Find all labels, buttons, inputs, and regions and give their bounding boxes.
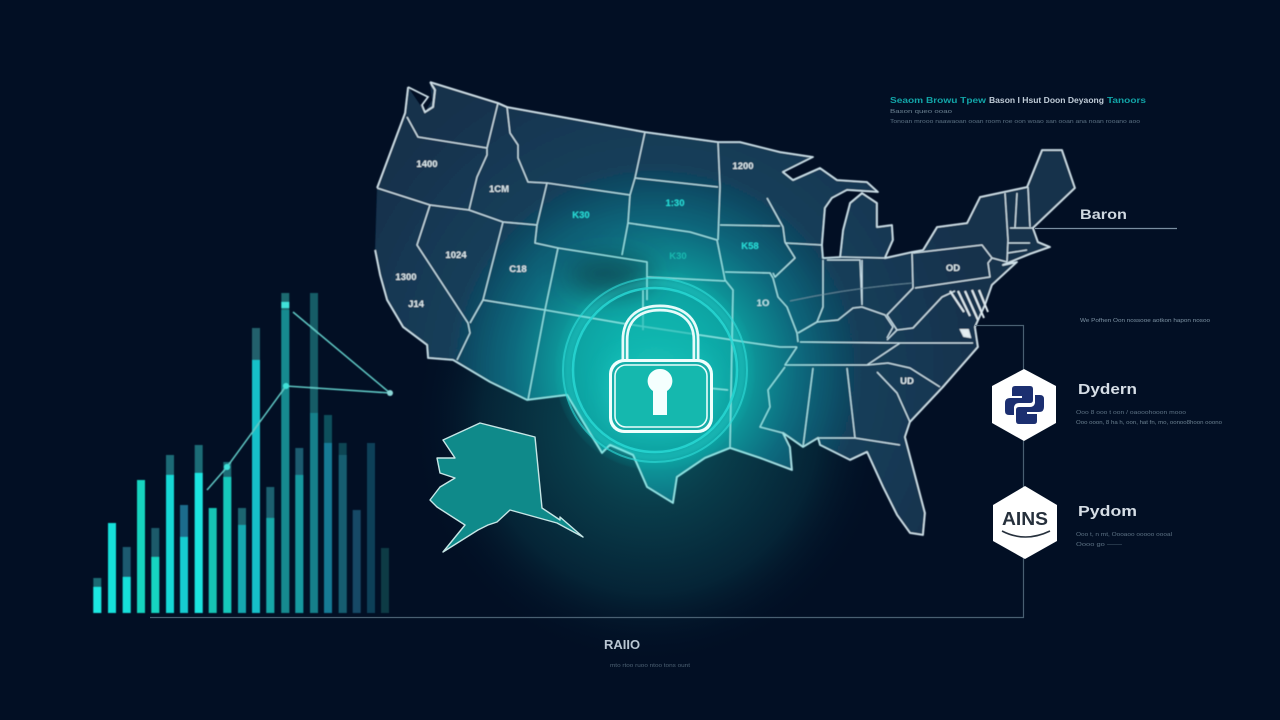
state value labels: K30 <box>572 210 590 221</box>
bar chart <box>93 293 393 613</box>
shackle <box>625 308 696 360</box>
small note line: We Pofhen Oon nossooe aotkon hapon nosoo <box>1080 318 1210 324</box>
glow rings <box>563 278 747 462</box>
hexagon icon: AWS: AINS <box>1002 509 1048 529</box>
state value labels: 1024 <box>445 250 467 261</box>
state value labels: J14 <box>408 299 425 310</box>
state value labels: 1400 <box>416 159 438 170</box>
security padlock with rings <box>563 278 747 462</box>
state value labels: UD <box>900 376 914 387</box>
Dydern text block: Ooo 8 ooo t oon / oaooohooon mooo <box>1076 410 1186 416</box>
chart baseline and connector lines <box>150 326 1024 618</box>
top right heading block: Tonoan mrooo naawaoan ooan room roe oon woao san ooan ana noan rooano aoo <box>890 119 1140 125</box>
state value labels: K58 <box>741 241 759 252</box>
state value labels: 1CM <box>489 184 509 195</box>
python snakes <box>1005 386 1044 424</box>
mainland fill <box>375 82 1075 535</box>
state value labels: 1200 <box>732 161 754 172</box>
map of the United States <box>375 82 1075 535</box>
bottom axis caption: mto rtoo ruoo ntoo tons ount <box>610 663 691 669</box>
bottom axis caption: RAIIO <box>604 637 640 652</box>
coastline stroke <box>375 82 1075 535</box>
Alaska <box>430 423 583 552</box>
state value labels: OD <box>946 263 960 274</box>
top right heading block: Seaom Browu Tpew <box>890 95 986 105</box>
bar backgrounds <box>93 293 347 613</box>
hexagon icon: Python <box>992 369 1056 441</box>
Pydom text block: Pydom <box>1078 503 1137 520</box>
state value labels: 1:30 <box>665 198 685 209</box>
Baron callout: Baron <box>1080 207 1127 222</box>
state borders <box>377 103 1033 448</box>
bottom axis caption <box>604 637 691 669</box>
Dydern text block <box>1076 381 1222 426</box>
Ohio valley arc <box>790 283 913 301</box>
lock glow <box>612 362 708 428</box>
state value labels <box>395 159 960 387</box>
Pydom text block: Oooo go —— <box>1076 542 1123 548</box>
state value labels: 1300 <box>395 272 417 283</box>
Pydom text block: Ooo t, n mt, Oooaoo ooooo oooal <box>1076 532 1172 538</box>
top right heading block: Bason I Hsut Doon Deyaong <box>989 95 1104 105</box>
lock body <box>609 359 713 433</box>
top right heading block <box>890 95 1146 125</box>
state value labels: 1O <box>757 298 769 309</box>
trend line <box>207 312 393 490</box>
Pydom text block <box>1076 503 1172 548</box>
top right heading block: Bason queo ooao <box>890 109 952 115</box>
lock halo over map <box>555 270 755 470</box>
Puget Sound detail <box>408 82 435 112</box>
Maryland and Delaware hatching <box>950 290 988 337</box>
top right heading block: Tanoors <box>1107 95 1146 105</box>
state value labels: K30 <box>669 251 687 262</box>
bar foregrounds <box>93 302 389 613</box>
hexagon icon: AWS <box>993 486 1057 559</box>
Dydern text block: Dydern <box>1078 381 1137 398</box>
keyhole <box>648 369 672 415</box>
shadow on Colorado <box>566 257 654 293</box>
Dydern text block: Ooo ooon, 8 ha h, oon, hat fn, mo, oonoo8hoon ooono <box>1076 420 1222 426</box>
state value labels: C18 <box>509 264 527 275</box>
